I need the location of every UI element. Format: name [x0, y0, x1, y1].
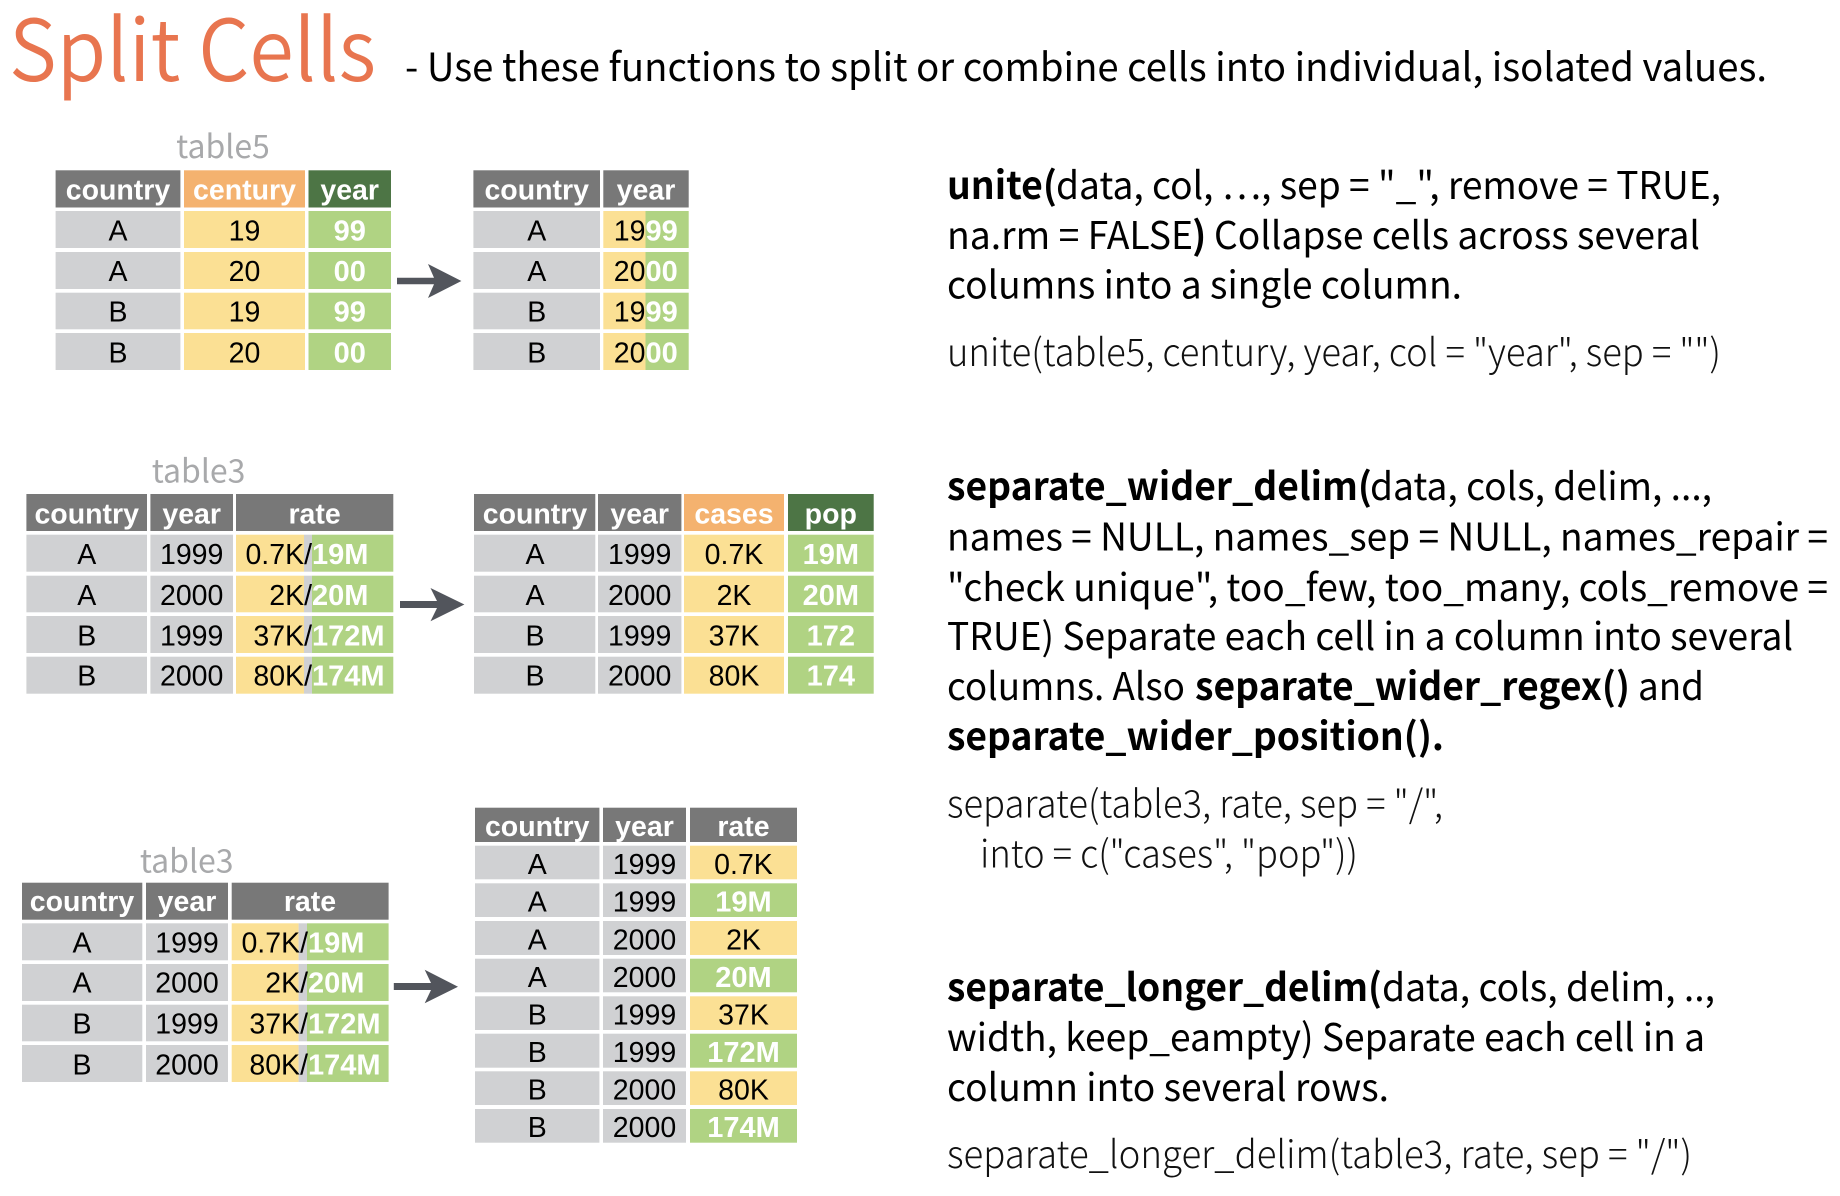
row 4	[22, 1045, 389, 1082]
code example: separate	[947, 774, 1443, 879]
header row	[56, 170, 391, 208]
row 2: A	[528, 887, 547, 919]
output table	[473, 170, 689, 370]
row 2: 20	[229, 256, 260, 288]
row 1: A	[72, 927, 92, 959]
row 6: B	[528, 1037, 547, 1069]
row 2: 2000	[155, 968, 219, 1000]
row 1: 19M	[312, 539, 368, 571]
row 2	[26, 576, 393, 612]
row 2	[56, 252, 391, 289]
row 1: 1999	[155, 927, 219, 959]
row 3: B	[72, 1008, 92, 1040]
row 3: 37K	[709, 621, 759, 653]
header row: country	[66, 174, 170, 206]
row 2: 2K	[717, 580, 751, 612]
row 3	[474, 616, 874, 653]
row 3: B	[525, 621, 545, 653]
row 3: 99	[334, 297, 366, 329]
row 1	[22, 923, 389, 960]
row 5: B	[528, 1000, 547, 1032]
row 3: A	[528, 924, 547, 956]
text block: unite description	[947, 155, 1721, 310]
row 4: B	[108, 337, 128, 369]
output table	[474, 494, 874, 694]
row 4: 174M	[308, 1049, 381, 1081]
row 2: 1999	[613, 887, 676, 919]
row 1: 99	[646, 216, 678, 248]
row 1: 1999	[608, 539, 671, 571]
row 3: 19	[229, 297, 260, 329]
row 4	[26, 657, 393, 694]
text block: unite description: data, col, …, sep = "_", remove = TRUE,	[1056, 155, 1721, 210]
row 2: 2000	[608, 580, 671, 612]
row 1	[473, 211, 689, 248]
header row: rate	[717, 811, 770, 843]
row 3	[475, 921, 797, 956]
header row: country	[34, 498, 139, 530]
row 2: 2K/	[269, 580, 312, 612]
header row	[26, 494, 393, 531]
panel: separate longer example	[22, 808, 797, 1144]
text block: unite description: columns into a single column.	[947, 255, 1462, 310]
header row: country	[485, 811, 590, 843]
row 4: 20	[229, 337, 260, 369]
text block: separate_longer_delim description: separate_longer_delim(	[947, 957, 1382, 1012]
header row: country	[483, 498, 587, 530]
header row: country	[484, 174, 589, 206]
arrow	[400, 588, 464, 621]
header row: pop	[805, 498, 857, 530]
row 1	[475, 846, 797, 881]
row 4	[473, 333, 689, 370]
header row	[475, 808, 797, 843]
text block: separate_wider_delim description: separate_wider_delim(	[947, 456, 1372, 511]
header row: year	[162, 498, 221, 530]
row 4: 174	[807, 661, 855, 693]
panel: unite example	[56, 122, 689, 370]
header row: year	[610, 498, 669, 530]
row 2: 2000	[160, 580, 223, 612]
text block: separate_wider_delim description: separate_wider_position().	[947, 706, 1444, 761]
row 3: 1999	[608, 621, 671, 653]
row 1: A	[528, 849, 547, 881]
row 1: 0.7K/	[241, 927, 308, 959]
row 3: B	[77, 621, 96, 653]
code example: separate: separate(table3, rate, sep = "/",	[947, 774, 1443, 829]
row 4: 80K	[709, 661, 759, 693]
text block: separate_wider_delim description: columns. Also	[947, 656, 1185, 711]
text block: separate_wider_delim description: names = NULL, names_sep = NULL, names_repair =	[947, 506, 1828, 561]
row 8	[475, 1109, 797, 1144]
row 2: 20M	[308, 968, 364, 1000]
row 1	[56, 211, 391, 248]
header row: country	[30, 886, 134, 918]
row 5: 1999	[613, 1000, 676, 1032]
row 3: 2000	[613, 924, 676, 956]
table label: table3: table3	[152, 447, 245, 493]
text block: separate_wider_delim description: TRUE) Separate each cell in a column into several	[947, 606, 1793, 661]
row 7	[475, 1071, 797, 1107]
row 2	[473, 252, 689, 289]
row 4: B	[77, 661, 96, 693]
text block: separate_wider_delim description	[947, 456, 1828, 761]
header row	[473, 170, 689, 208]
row 4: 2000	[608, 661, 671, 693]
row 2: 20M	[312, 580, 368, 612]
row 3	[473, 293, 689, 329]
row 1: A	[77, 539, 96, 571]
row 1: A	[525, 539, 545, 571]
table label: table5: table5	[176, 122, 270, 168]
row 1: 19M	[803, 539, 859, 571]
row 4: A	[528, 962, 547, 994]
row 4: 2000	[613, 962, 676, 994]
row 2: 20	[614, 256, 646, 288]
row 5	[475, 996, 797, 1032]
row 2: A	[77, 580, 96, 612]
row 4: 80K/	[253, 661, 312, 693]
row 7: B	[528, 1075, 547, 1107]
row 3: 37K/	[253, 621, 312, 653]
header row: rate	[288, 498, 341, 530]
row 1: 19	[614, 216, 646, 248]
row 3: 37K/	[249, 1008, 308, 1040]
row 3: 172	[807, 621, 855, 653]
row 1: 1999	[160, 539, 223, 571]
row 1	[26, 535, 393, 572]
row 3: B	[527, 297, 546, 329]
arrow	[397, 264, 461, 298]
row 1: 99	[334, 216, 366, 248]
row 1: A	[108, 216, 128, 248]
header row: year	[158, 886, 216, 918]
output table	[475, 808, 797, 1144]
code example: separate: into = c("cases", "pop"))	[980, 824, 1358, 879]
header row	[474, 494, 874, 531]
row 4	[56, 333, 391, 370]
row 5: 37K	[718, 1000, 769, 1032]
row 4	[474, 657, 874, 694]
row 3	[26, 616, 393, 653]
row 1: 0.7K/	[245, 539, 312, 571]
code example: separate_longer_delim: separate_longer_delim(table3, rate, sep = "/")	[947, 1124, 1692, 1179]
row 2: 19M	[715, 887, 772, 919]
header row: century	[193, 174, 296, 206]
row 1: A	[527, 216, 546, 248]
row 2: A	[525, 580, 545, 612]
row 8: B	[528, 1112, 547, 1144]
row 4: B	[72, 1049, 92, 1081]
row 7: 80K	[718, 1075, 769, 1107]
row 2	[22, 964, 389, 1001]
row 6: 172M	[707, 1037, 780, 1069]
row 4: 174M	[312, 661, 385, 693]
header row: cases	[694, 498, 774, 530]
text block: separate_wider_delim description: separate_wider_regex()	[1195, 656, 1630, 711]
header row: year	[615, 811, 674, 843]
subtitle: - Use these functions to split or combine cells into individual, isolated values.	[405, 37, 1767, 93]
row 3: 2K	[726, 924, 761, 956]
row 4: B	[527, 337, 546, 369]
input table	[56, 170, 391, 370]
row 2	[474, 576, 874, 612]
row 1: 19M	[308, 927, 364, 959]
row 3: 99	[646, 297, 678, 329]
text block: unite description: unite(	[947, 155, 1057, 210]
row 3: 19	[614, 297, 646, 329]
row 4: 80K/	[249, 1049, 308, 1081]
code example: unite: unite(table5, century, year, col = "year", sep = "")	[947, 322, 1721, 377]
row 3	[56, 293, 391, 329]
input table	[22, 883, 389, 1082]
row 2	[475, 883, 797, 919]
text block: separate_longer_delim description: data, cols, delim, ..,	[1382, 957, 1715, 1012]
text block: unite description: na.rm = FALSE	[947, 205, 1193, 260]
row 1: 0.7K	[714, 849, 773, 881]
row 4: 00	[334, 337, 366, 369]
row 3: B	[108, 297, 128, 329]
row 2: A	[108, 256, 128, 288]
row 2: 00	[646, 256, 678, 288]
row 3	[22, 1005, 389, 1041]
text block: unite description: Collapse cells across several	[1214, 205, 1700, 260]
text block: separate_longer_delim description: width, keep_eampty) Separate each cell in a	[947, 1007, 1705, 1062]
row 7: 2000	[613, 1075, 676, 1107]
panel: separate wider example	[26, 447, 874, 694]
row 6: 1999	[613, 1037, 676, 1069]
text block: separate_wider_delim description: "check unique", too_few, too_many, cols_remove =	[947, 557, 1828, 612]
row 2: 2K/	[265, 968, 308, 1000]
row 8: 174M	[707, 1112, 780, 1144]
row 3: 172M	[312, 621, 385, 653]
text block: separate_longer_delim description: column into several rows.	[947, 1057, 1389, 1112]
table label: table3: table3	[140, 836, 234, 882]
row 2: A	[72, 968, 92, 1000]
text block: separate_wider_delim description: data, cols, delim, ...,	[1370, 456, 1712, 511]
row 2: A	[527, 256, 546, 288]
row 3: 1999	[155, 1008, 219, 1040]
row 4: 20M	[715, 962, 772, 994]
row 8: 2000	[613, 1112, 676, 1144]
row 4: 00	[646, 337, 678, 369]
header row	[22, 883, 389, 920]
row 2: 20M	[803, 580, 859, 612]
header row: year	[320, 174, 379, 206]
arrow	[394, 970, 458, 1003]
input table	[26, 494, 393, 694]
row 2: 00	[334, 256, 366, 288]
row 4: 20	[614, 337, 646, 369]
row 4: 2000	[155, 1049, 219, 1081]
row 1	[474, 535, 874, 572]
text block: unite description: )	[1192, 205, 1206, 260]
text block: separate_longer_delim description	[947, 957, 1715, 1112]
row 6	[475, 1034, 797, 1069]
row 1: 19	[229, 216, 260, 248]
text block: separate_wider_delim description: and	[1638, 656, 1704, 711]
row 4: 2000	[160, 661, 223, 693]
row 4: B	[525, 661, 545, 693]
row 3: 1999	[160, 621, 223, 653]
row 3: 172M	[308, 1008, 381, 1040]
header row: year	[617, 174, 675, 206]
row 1: 0.7K	[705, 539, 763, 571]
header row: rate	[284, 886, 336, 918]
row 1: 1999	[613, 849, 676, 881]
row 4	[475, 959, 797, 994]
